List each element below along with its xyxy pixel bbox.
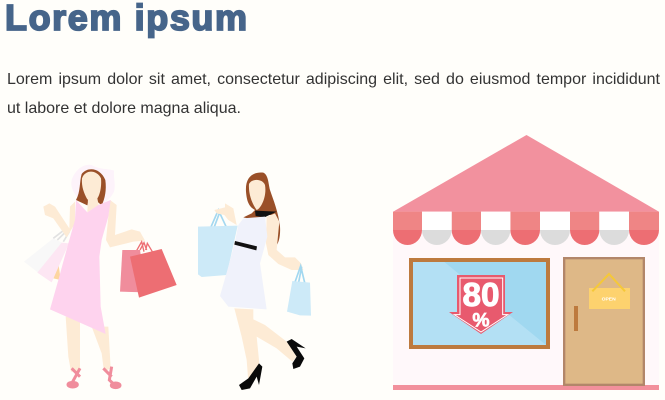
roof xyxy=(393,135,659,212)
shopping bag: small blue xyxy=(287,266,311,316)
shoes xyxy=(239,339,306,390)
discount arrow badge: 80 xyxy=(462,277,500,314)
floor strip xyxy=(393,385,659,390)
figure: woman in pink dress xyxy=(24,165,177,388)
body text: Lorem ipsum dolor sit amet, consectetur adipiscing elit, sed do eiusmod tempor incididunt xyxy=(7,71,660,88)
shop wall xyxy=(393,211,659,385)
body text: ut labore et dolore magna aliqua. xyxy=(7,100,241,117)
shop building xyxy=(393,135,659,390)
door xyxy=(564,258,644,385)
window xyxy=(409,258,550,349)
shopping bag: large blue xyxy=(198,210,238,277)
open sign xyxy=(589,274,630,309)
discount arrow badge: % xyxy=(472,310,490,331)
shopping bags: red xyxy=(120,242,177,298)
body text xyxy=(7,71,660,117)
sandals xyxy=(68,367,120,388)
discount arrow badge xyxy=(449,275,513,334)
open sign: OPEN xyxy=(602,297,616,303)
awning xyxy=(393,212,659,245)
figure: woman in white dress xyxy=(198,173,311,390)
